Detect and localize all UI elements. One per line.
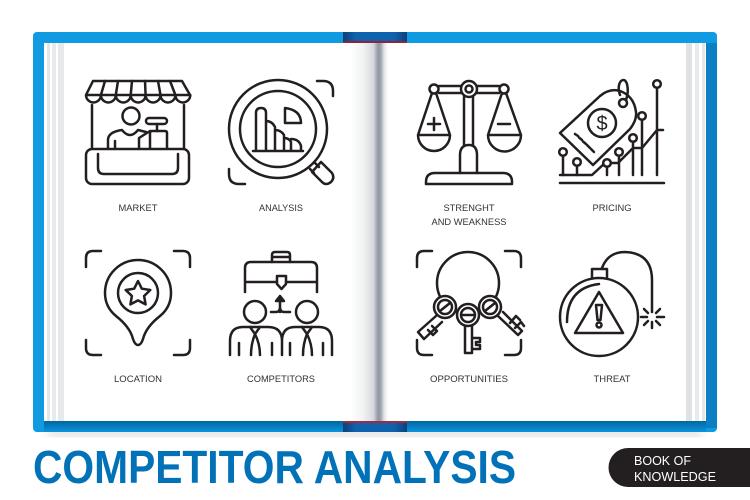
book pages [44, 43, 706, 421]
labels: LOCATION [114, 374, 162, 385]
labels [114, 203, 632, 385]
dollar sign: $ [596, 113, 608, 135]
labels: ANALYSIS [259, 203, 303, 214]
icon: keys on a ring [417, 251, 524, 355]
labels: THREAT [594, 374, 631, 385]
spine bottom [343, 421, 407, 432]
book cover [33, 32, 717, 436]
labels: AND WEAKNESS [432, 217, 506, 228]
badge: book of knowledge [608, 448, 750, 487]
labels: COMPETITORS [247, 374, 315, 385]
icon: bomb with warning [560, 252, 664, 356]
icon: price tag and chart [559, 80, 664, 183]
spine top [343, 32, 407, 43]
labels: STRENGHT [444, 203, 495, 214]
icon: market stall [86, 81, 190, 184]
badge: book of knowledge: BOOK OF [634, 453, 691, 468]
icon: balance scale [418, 81, 521, 184]
icon: analysis magnifier [229, 80, 333, 184]
title: COMPETITOR ANALYSIS [33, 441, 516, 493]
labels: MARKET [118, 203, 158, 214]
labels: PRICING [592, 203, 632, 214]
icon: competitors with briefcase [230, 252, 332, 355]
icon: location pin [86, 251, 190, 355]
labels: OPPORTUNITIES [430, 374, 508, 385]
badge: book of knowledge: KNOWLEDGE [634, 469, 716, 484]
